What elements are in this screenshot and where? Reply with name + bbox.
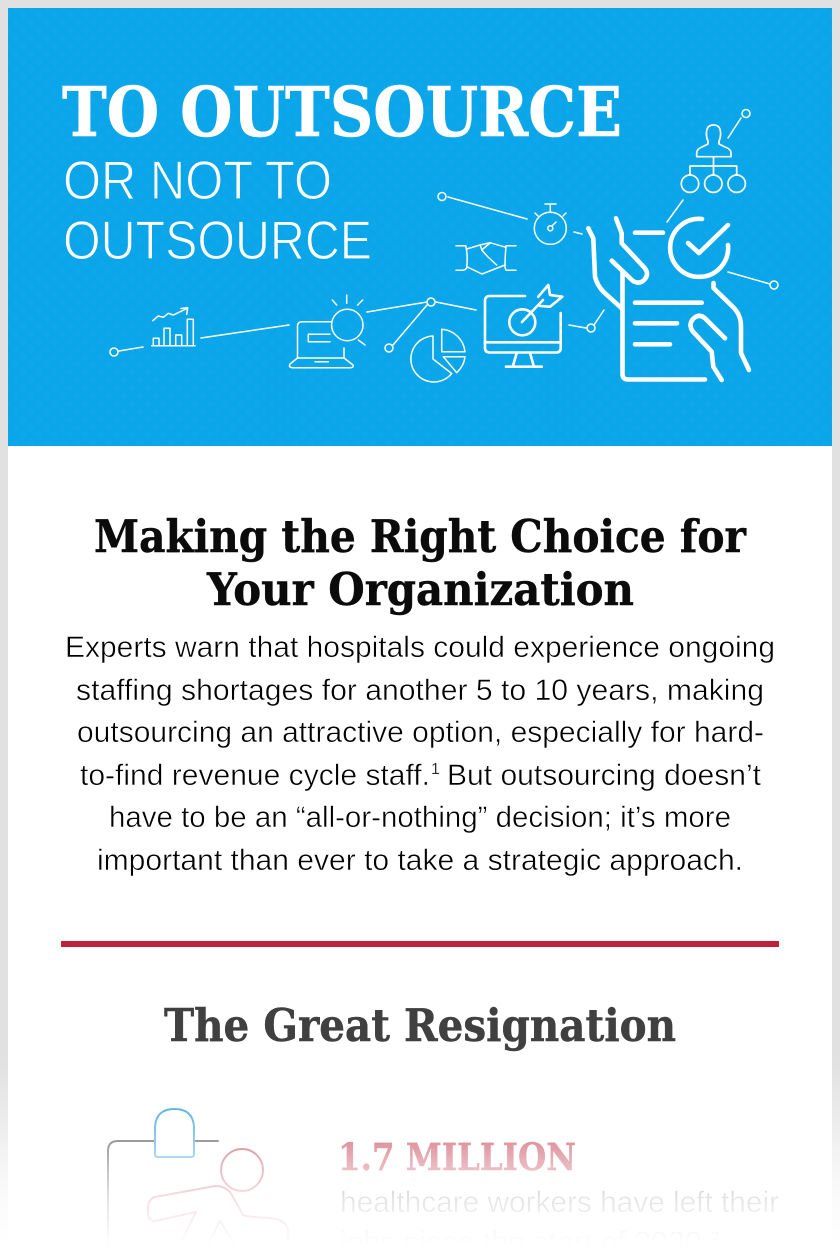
title: TO OUTSOURCE (62, 73, 622, 153)
stat: 1.7 million: 1.7 MILLION (338, 1135, 576, 1179)
icon: person leaving through door (108, 1109, 288, 1260)
intro text block (65, 631, 775, 877)
stat: 1.7 million (338, 1135, 779, 1259)
icon: stopwatch (534, 204, 566, 244)
stat: 1.7 million: jobs since the start of 2020.² (339, 1226, 720, 1259)
title: OUTSOURCE (63, 209, 372, 271)
intro text block: important than ever to take a strategic approach. (97, 844, 743, 877)
heading: Your Organization (206, 563, 634, 616)
bottom fade (0, 1060, 840, 1260)
intro text block: staffing shortages for another 5 to 10 years, making (76, 674, 764, 707)
intro text block: But outsourcing doesn’t (447, 759, 762, 792)
heading: Making the Right Choice for (94, 510, 747, 563)
intro text block: Experts warn that hospitals could experience ongoing (65, 631, 775, 664)
intro text block: have to be an “all-or-nothing” decision; it’s more (109, 801, 731, 834)
icon: pie chart (411, 329, 465, 382)
panel: blue header (8, 8, 832, 446)
icon: hands holding checklist (588, 218, 749, 380)
icon: monitor with target (485, 285, 562, 367)
icon: handshake (456, 243, 516, 274)
stat: 1.7 million: healthcare workers have left their (340, 1186, 779, 1219)
divider (61, 941, 779, 947)
intro text block: outsourcing an attractive option, especially for hard- (77, 716, 764, 749)
white card (8, 446, 832, 1260)
icon: growth chart (152, 308, 195, 346)
title (62, 73, 622, 271)
title: OR NOT TO (63, 149, 332, 211)
intro text block: to-find revenue cycle staff. (80, 759, 430, 792)
connector lines and nodes (110, 110, 778, 356)
section heading: The Great Resignation (164, 999, 676, 1052)
icon: laptop with magnifier (289, 295, 365, 368)
heading (94, 510, 747, 616)
intro text block: 1 (431, 761, 440, 778)
icon: org chart (681, 125, 745, 192)
